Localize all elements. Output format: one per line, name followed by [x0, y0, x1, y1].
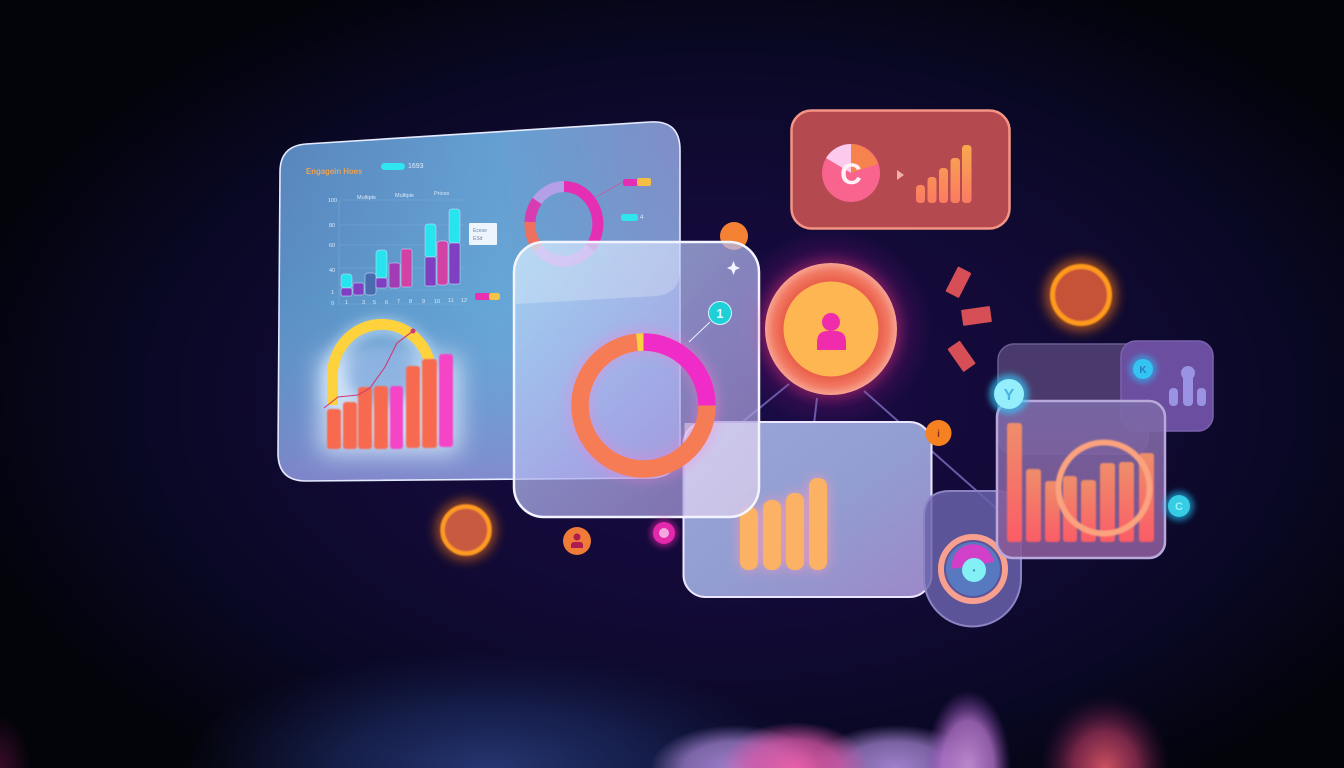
- donut legend: 4: [640, 215, 644, 221]
- mini bars icon: [1169, 366, 1206, 406]
- rising bars: [916, 145, 972, 203]
- column chart: 3: [362, 300, 365, 306]
- heading pill and value: [381, 163, 424, 170]
- column chart: 80: [329, 223, 335, 229]
- small person node: [563, 527, 591, 555]
- panel: analytics dashboard: [278, 122, 680, 481]
- column chart: 6: [385, 300, 388, 306]
- column chart: 100: [328, 198, 337, 204]
- small orange info dot: i: [937, 429, 940, 440]
- cyan badge right: [1164, 491, 1194, 521]
- panel: top metrics card: [792, 110, 1010, 228]
- column chart: Multiple: [357, 195, 376, 201]
- overlap highlight with lower card: [684, 423, 758, 516]
- panel: bottom ring card: [924, 491, 1021, 626]
- column chart: Multiple: [395, 193, 414, 199]
- badge with leader line: [689, 302, 732, 342]
- arrow: [897, 170, 904, 180]
- card top highlight band: [514, 243, 680, 304]
- small donut chart: [530, 186, 598, 261]
- panel: lower bar card: [684, 422, 932, 597]
- panel: back dark card: [998, 344, 1148, 454]
- glowing ring lower left: [442, 506, 490, 554]
- column chart: 11: [448, 298, 454, 304]
- overlay ring: [1058, 442, 1150, 534]
- panel: purple icon card: [1121, 341, 1213, 431]
- glowing ring top right: [1052, 266, 1110, 324]
- column chart: 7: [397, 299, 400, 305]
- columns: [1007, 423, 1154, 542]
- column chart: 10: [434, 299, 440, 305]
- small magenta node: [650, 519, 678, 547]
- chart note: [469, 223, 497, 245]
- column chart: 1: [345, 300, 348, 306]
- column chart: 9: [422, 299, 425, 305]
- cyan badge: K: [1139, 365, 1147, 376]
- column chart: Prices: [434, 191, 450, 197]
- badge with leader line: 1: [716, 306, 724, 321]
- user avatar node: [761, 259, 901, 399]
- pie icon: C: [840, 158, 862, 191]
- heading pill and value: 1693: [408, 163, 424, 170]
- panel: front chart card: [997, 401, 1165, 558]
- gauge and bars chart: [320, 324, 460, 454]
- sparkle icon: [727, 261, 740, 275]
- red dash marks: [945, 266, 992, 372]
- chart note: Ecese: [473, 228, 487, 234]
- cyan bird badge: [989, 374, 1029, 414]
- ring target icon: •: [973, 566, 976, 575]
- connector lines: [735, 384, 996, 508]
- person icon: [817, 313, 846, 350]
- cyan badge right: C: [1175, 501, 1183, 513]
- panel: front donut card: [514, 242, 759, 517]
- pie icon: [822, 144, 880, 202]
- chart note: ESd: [473, 236, 483, 242]
- column chart: 1: [331, 290, 334, 296]
- column chart: 0: [331, 301, 334, 307]
- lower card bars: [740, 478, 827, 570]
- column chart: 8: [409, 299, 412, 305]
- chart legend: [475, 293, 500, 300]
- small orange info dot: [926, 420, 952, 446]
- column chart: 60: [329, 243, 335, 249]
- cyan bird badge: Y: [1004, 387, 1015, 404]
- panel heading: Engagein Hoes: [306, 167, 363, 176]
- large donut chart: [580, 341, 708, 469]
- column chart: 40: [329, 268, 335, 274]
- floor reflection glow: [0, 650, 1170, 768]
- orange dot: [720, 222, 748, 250]
- column chart: 12: [461, 298, 467, 304]
- column chart: [328, 191, 467, 307]
- column chart: 5: [373, 300, 376, 306]
- donut legend: [596, 178, 651, 221]
